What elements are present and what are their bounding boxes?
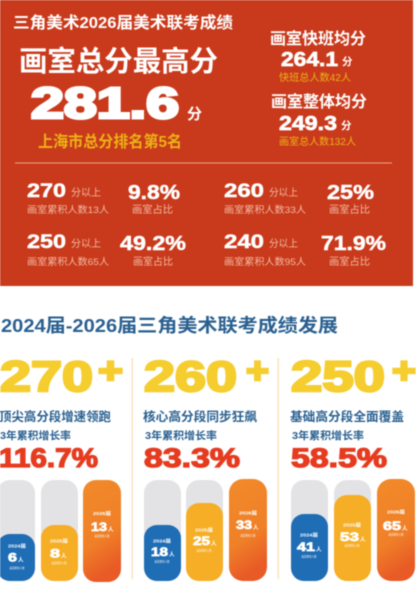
overall average: 画室总人数132人 — [279, 135, 356, 148]
growth label: 3年累积增长率 — [0, 429, 72, 442]
overall average: 249.3 — [279, 113, 337, 135]
bar chart 260+: 人 — [169, 551, 175, 558]
growth label: 3年累积增长率 — [145, 429, 218, 442]
big number 270+: 270 — [0, 353, 93, 401]
bar chart 260+: 人 — [211, 540, 217, 547]
bar chart 270+: 13 — [91, 520, 107, 534]
bar chart 260+: 18 — [151, 545, 168, 559]
bar chart 250+: 2026届 — [387, 510, 406, 516]
bar chart 260+: 画室累积人数 — [154, 558, 170, 564]
stat: 270 and above: 9.8% — [128, 182, 180, 204]
bar chart 250+: 人 — [360, 536, 366, 543]
bar chart 250+: 53 — [340, 530, 359, 544]
fast class average — [270, 29, 366, 84]
bar chart 270+: 2025届 — [50, 538, 69, 544]
big number 250+: 250 — [291, 353, 385, 401]
bar chart 260+: 2025届 — [195, 528, 214, 534]
stat: 270 and above: 270 — [27, 181, 66, 202]
overall average: 画室整体均分 — [271, 92, 367, 111]
stat: 260 and above: 25% — [327, 182, 374, 204]
stat: 250 and above: 250 — [27, 232, 66, 253]
subheading: 顶尖高分段增速领跑 — [0, 409, 111, 424]
top score number: 281.6 — [31, 79, 179, 128]
bar chart 260+: 人 — [253, 524, 259, 531]
bar chart 260+: 画室累积人数 — [196, 548, 212, 552]
bar chart 270+: 人 — [61, 552, 67, 560]
panel: 2026 results — [0, 0, 413, 286]
fast class average: 264.1 — [281, 49, 338, 71]
bar chart 250+: 画室累积人数 — [302, 554, 316, 558]
city rank: 上海市总分排名第5名 — [38, 132, 182, 151]
growth rate: 116.7% — [0, 443, 98, 473]
growth rate: 58.5% — [291, 443, 387, 473]
bar chart 260+: 25 — [193, 534, 210, 548]
top score unit: 分 — [187, 106, 202, 123]
bar chart 250+: 人 — [402, 525, 408, 532]
panel title: 三角美术2026届美术联考成绩 — [13, 13, 233, 32]
bar chart 250+: 画室累积人数 — [344, 542, 360, 548]
heading: highest total score: 画室总分最高分 — [19, 46, 218, 78]
stat: 250 and above: 49.2% — [120, 233, 186, 255]
column: 250+ — [290, 350, 416, 581]
stat: 260 and above — [224, 181, 374, 216]
column: 260+ — [143, 350, 269, 581]
bar chart 270+: 人 — [108, 526, 114, 533]
stat: 250 and above: 画室累积人数65人 — [27, 256, 110, 268]
big number 260+ — [144, 350, 269, 401]
growth label: 3年累积增长率 — [292, 429, 365, 442]
stat: 240 and above — [224, 232, 386, 268]
growth rate: 83.3% — [144, 443, 240, 473]
overall average: 分 — [341, 119, 352, 132]
stat: 260 and above: 画室累积人数33人 — [224, 204, 307, 216]
stat: 250 and above — [27, 232, 186, 268]
subheading: 核心高分段同步狂飙 — [143, 409, 257, 424]
section heading: 2024届-2026届三角美术联考成绩发展 — [1, 315, 338, 336]
stat: 270 and above: 画室占比 — [132, 203, 173, 216]
subheading: 基础高分段全面覆盖 — [290, 409, 404, 424]
big number 260+: 260 — [144, 353, 237, 401]
stat: 240 and above: 71.9% — [321, 233, 386, 255]
bar chart 250+: 画室累积人数 — [388, 532, 404, 536]
stat: 250 and above: 画室占比 — [133, 255, 173, 268]
bar chart 250+: 2025届 — [343, 522, 362, 528]
big number 270+ — [0, 350, 123, 401]
stat: 270 and above: 画室累积人数13人 — [27, 204, 110, 216]
stat: 240 and above: 画室累积人数95人 — [224, 256, 307, 268]
bar chart 270+: 画室累积人数 — [10, 565, 24, 570]
bar chart 260+: 33 — [236, 518, 252, 532]
stat: 260 and above: 260 — [224, 181, 264, 202]
bar chart 260+: 2024届 — [153, 538, 172, 544]
bar chart 270+: 2024届 — [8, 544, 27, 550]
bar chart 270+: 6 — [8, 550, 17, 564]
bar chart 270+: 2026届 — [93, 511, 112, 517]
big number 270+: + — [98, 350, 123, 391]
bar chart 260+: 2026届 — [239, 510, 258, 516]
fast class average: 分 — [342, 55, 353, 68]
stat: 260 and above: 分以上 — [269, 187, 298, 199]
bar chart 250+: 2024届 — [300, 532, 319, 538]
column: 270+ — [0, 350, 123, 582]
bar chart 250+ — [291, 479, 415, 581]
stat: 240 and above: 画室占比 — [329, 255, 370, 268]
big number 260+: + — [246, 350, 269, 391]
bar chart 250+: 人 — [316, 546, 322, 553]
overall average — [271, 92, 367, 148]
bar chart 260+: 画室累积人数 — [240, 532, 256, 538]
bar chart 270+: 8 — [50, 546, 60, 560]
bar chart 270+: 人 — [18, 556, 24, 564]
stat: 250 and above: 分以上 — [71, 238, 101, 250]
stat: 260 and above: 画室占比 — [329, 203, 370, 216]
bar chart 250+: 41 — [297, 540, 315, 554]
bar chart 260+ — [144, 479, 267, 581]
stat: 240 and above: 分以上 — [269, 238, 298, 250]
bar chart 270+: 画室累积人数 — [94, 533, 110, 538]
big number 250+ — [291, 350, 416, 401]
fast class average: 画室快班均分 — [270, 29, 366, 48]
stat: 270 and above — [27, 181, 180, 216]
bar chart 270+: 画室累积人数 — [52, 560, 66, 565]
bar chart 250+: 65 — [383, 519, 401, 533]
fast class average: 快班总人数42人 — [279, 71, 351, 84]
stat: 240 and above: 240 — [224, 232, 264, 253]
bar chart 270+ — [0, 480, 121, 582]
big number 250+: + — [392, 350, 416, 391]
stat: 270 and above: 分以上 — [71, 187, 101, 199]
